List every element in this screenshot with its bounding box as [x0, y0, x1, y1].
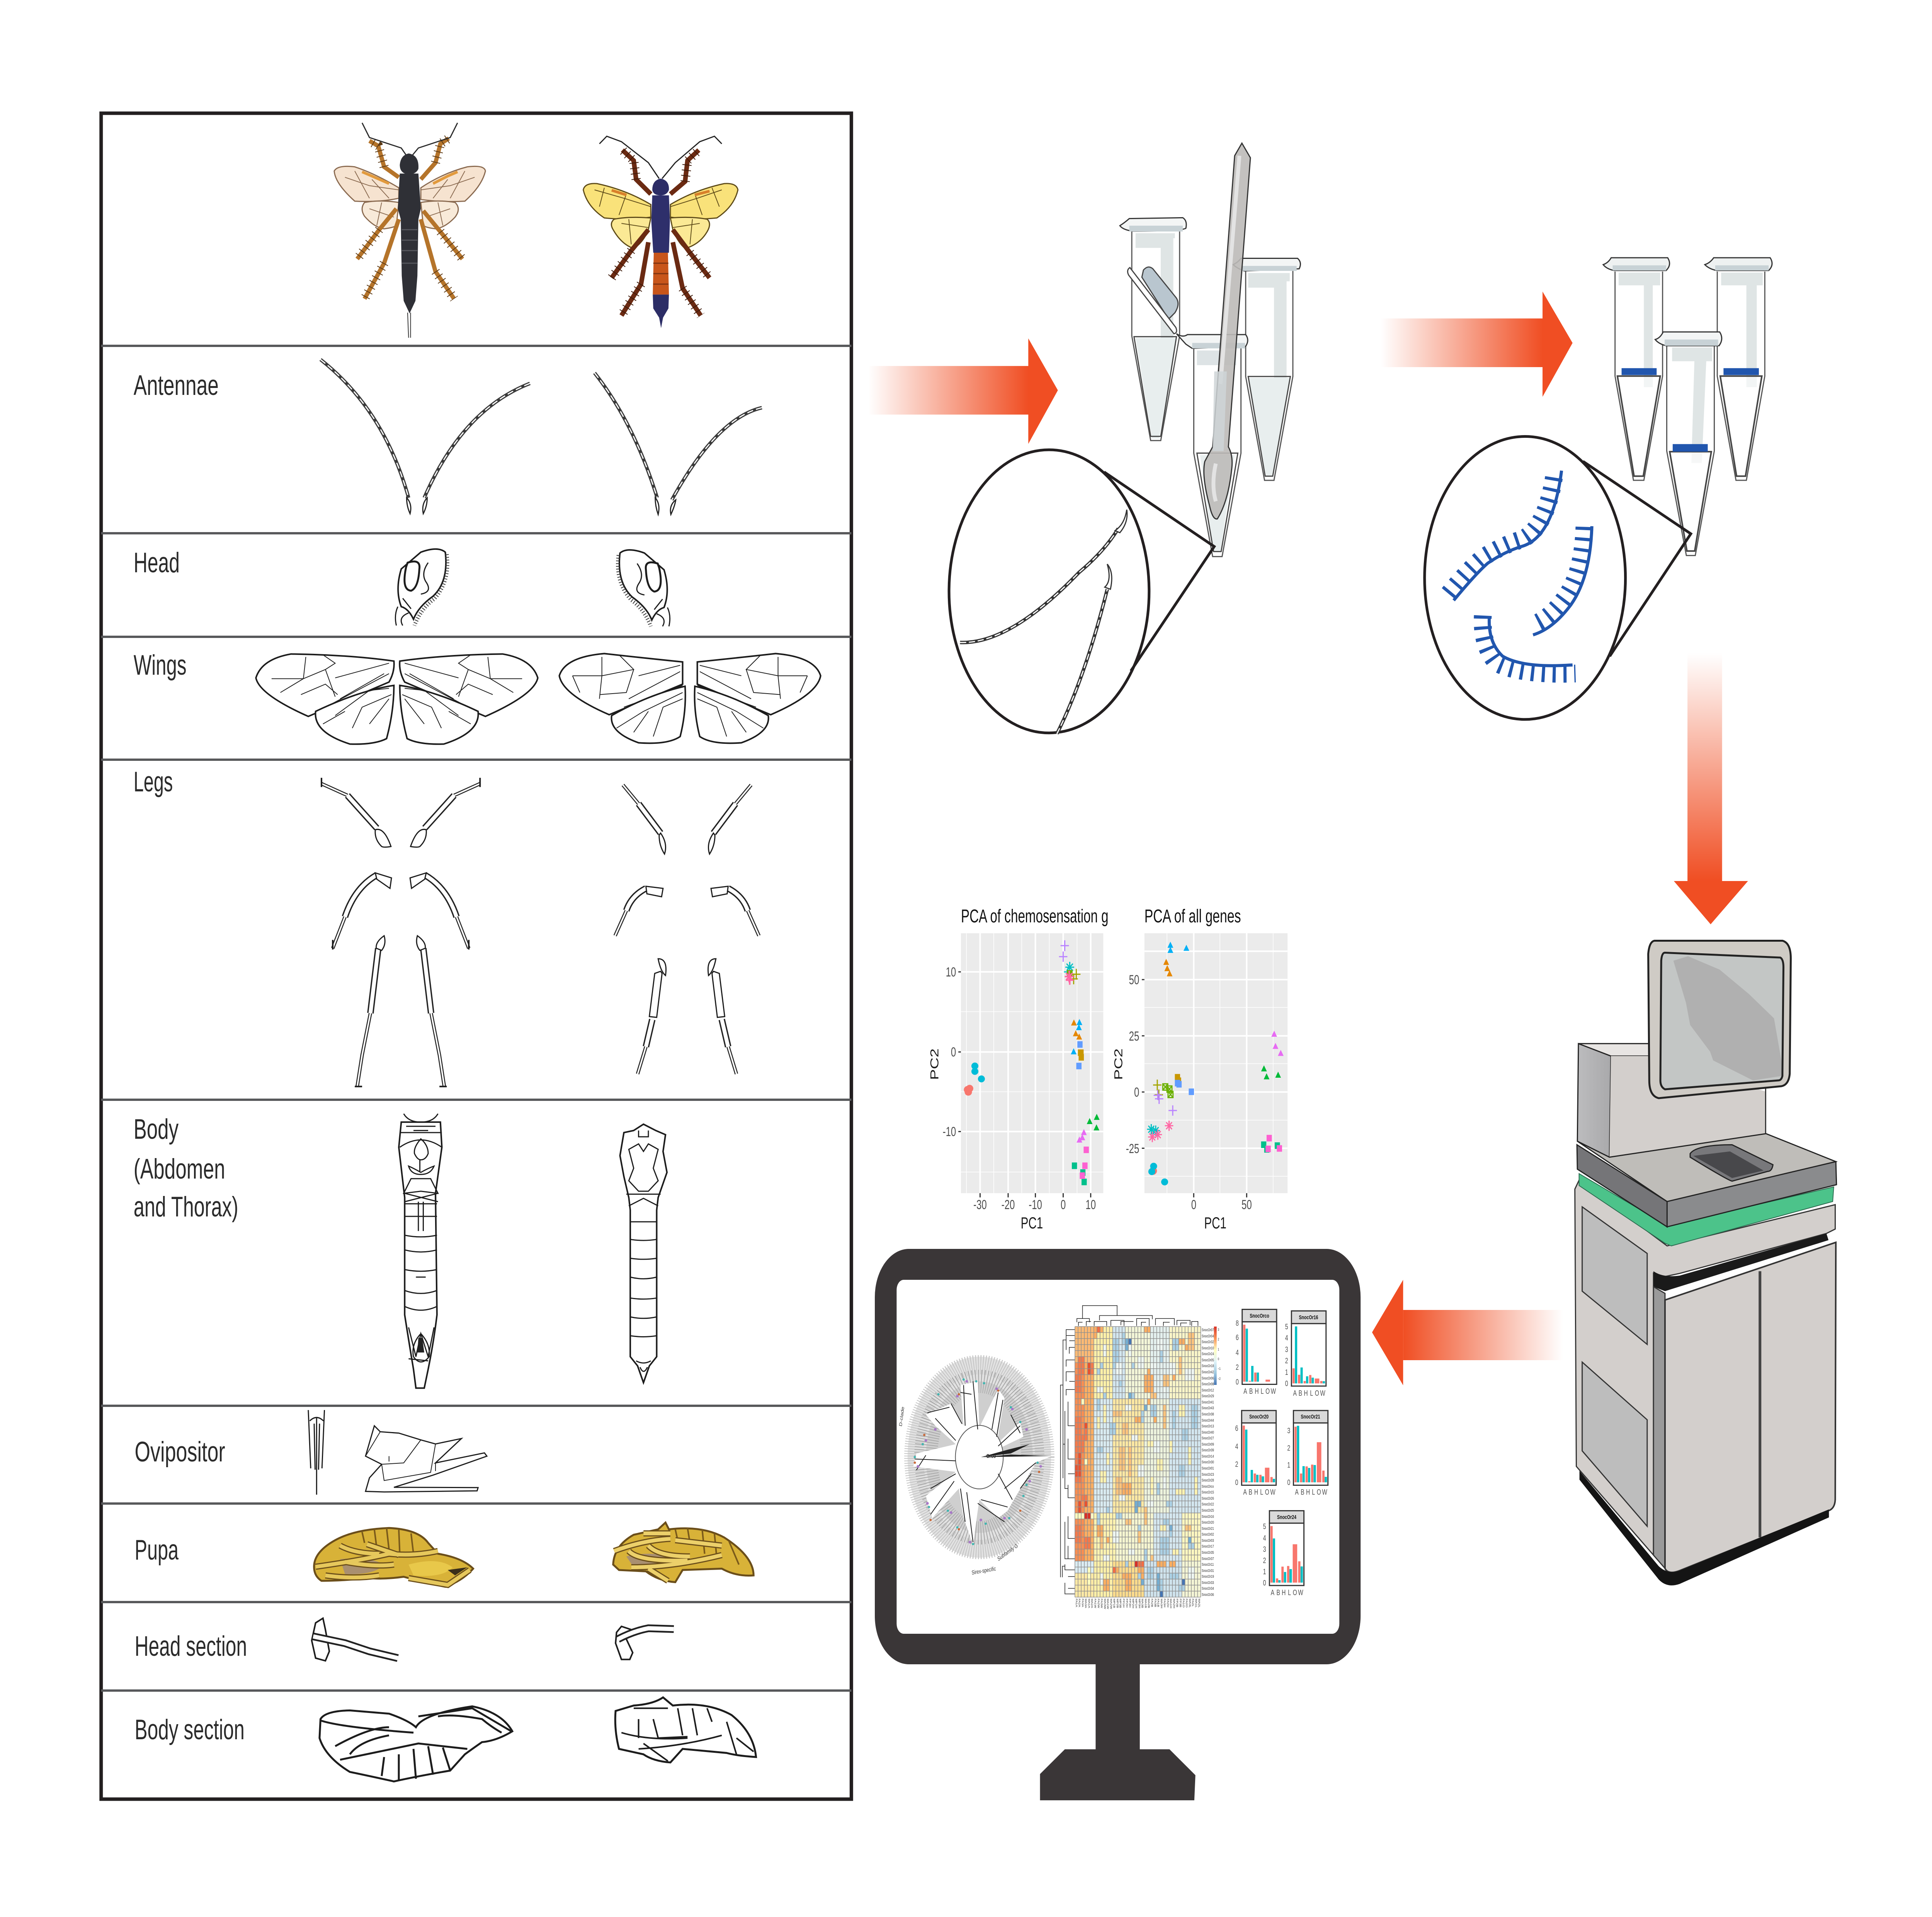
chart title: PCA of chemosensation g — [961, 905, 1109, 926]
heatmap row labels: SnocOr12 — [1202, 1388, 1214, 1392]
row label: Body (Abdomen and Thorax) — [134, 1114, 238, 1223]
heatmap row labels: SnocOr11 — [1202, 1562, 1214, 1567]
heatmap column labels: MA3H — [1160, 1599, 1163, 1608]
chart: bar plot SnocOr24: A — [1271, 1588, 1274, 1597]
heatmap row labels: SnocOr23 — [1202, 1472, 1214, 1476]
axis labels: PC1 — [1204, 1214, 1226, 1232]
heatmap row labels: SnocOr26 — [1202, 1496, 1214, 1500]
row label: Wings: Wings — [134, 650, 187, 681]
illustration: antennae line drawings — [320, 359, 762, 514]
axis labels: -10 — [943, 1124, 956, 1139]
tree labels: Orco — [986, 1453, 996, 1459]
heatmap column labels: MA2A — [1091, 1599, 1094, 1608]
chart: bar plot SnocOrco: W — [1271, 1387, 1276, 1396]
heatmap row labels: SnocOr43 — [1202, 1406, 1214, 1410]
heatmap column labels: FA1B — [1157, 1599, 1160, 1607]
chart: bar plot SnocOrco: 8 — [1236, 1319, 1239, 1328]
heatmap colour legend: 3 — [1218, 1328, 1219, 1332]
heatmap row labels: SnocOr21 — [1202, 1526, 1214, 1531]
axis labels: -10 — [1029, 1197, 1042, 1212]
heatmap colour legend: 1 — [1218, 1347, 1219, 1351]
heatmap column labels: FA2O — [1185, 1599, 1188, 1607]
heatmap grid lines — [1075, 1327, 1201, 1597]
chart: circular phylogenetic tree — [898, 1357, 1052, 1576]
icon: computer monitor — [875, 1249, 1361, 1800]
heatmap colour legend: −1 — [1218, 1367, 1221, 1371]
chart: bar plot SnocOr24: 5 — [1263, 1522, 1266, 1531]
chart: bar plot SnocOrco: L — [1261, 1387, 1264, 1396]
heatmap column labels: MA1A — [1088, 1599, 1090, 1608]
illustration: ovipositor — [308, 1410, 487, 1495]
tree labels: D-clade — [898, 1406, 905, 1427]
chart: bar plot SnocOr16: 0 — [1285, 1379, 1288, 1388]
heatmap colour legend: −2 — [1218, 1377, 1221, 1381]
chart: bar plot SnocOr24: O — [1293, 1588, 1297, 1597]
heatmap row labels: SnocOr35 — [1202, 1550, 1214, 1555]
axis labels: 25 — [1129, 1029, 1139, 1044]
heatmap row labels: SnocOr10 — [1202, 1346, 1214, 1350]
chart: bar plot SnocOr16: SnocOr16 — [1299, 1314, 1318, 1320]
chart: bar plot SnocOr20: W — [1270, 1488, 1276, 1497]
heatmap column labels: MA2W — [1110, 1599, 1112, 1609]
heatmap row labels: SnocOr18 — [1202, 1364, 1214, 1368]
chart: bar plot SnocOr20: 6 — [1235, 1424, 1238, 1433]
arrow: to RNA tubes — [1381, 291, 1573, 397]
axis labels — [928, 965, 1096, 1232]
heatmap column labels: FA3W — [1100, 1599, 1103, 1608]
heatmap row labels: SnocOr07 — [1202, 1328, 1214, 1332]
callout: magnified antennae — [949, 450, 1214, 734]
heatmap column labels: MP3H — [1138, 1599, 1141, 1608]
heatmap column labels: MA2L — [1198, 1599, 1201, 1608]
heatmap column labels: MA3B — [1141, 1599, 1144, 1608]
chart: bar plot SnocOr16: 3 — [1285, 1345, 1288, 1354]
tree labels — [898, 1406, 1019, 1576]
chart: heatmap of odorant receptor expression — [1061, 1306, 1221, 1609]
row label: Antennae: Antennae — [134, 370, 219, 401]
axis labels: 0 — [951, 1045, 956, 1060]
heatmap row labels: SnocOr29 — [1202, 1394, 1214, 1398]
heatmap column labels: MA2B — [1147, 1599, 1150, 1608]
heatmap column labels: FP3B — [1179, 1599, 1182, 1607]
arrow: to analysis computer — [1372, 1280, 1563, 1385]
heatmap column labels: FP2H — [1126, 1599, 1128, 1607]
heatmap row labels: SnocOr06 — [1202, 1376, 1214, 1380]
heatmap row labels: SnocOr14 — [1202, 1454, 1214, 1458]
chart: bar plot SnocOr24: B — [1276, 1588, 1280, 1597]
heatmap column labels: FP2B — [1176, 1599, 1179, 1607]
heatmap row labels: SnocOr02 — [1202, 1532, 1214, 1536]
chart: bar plot SnocOr16: B — [1299, 1389, 1302, 1398]
heatmap column labels: FA2B — [1151, 1599, 1153, 1607]
axis labels: -25 — [1126, 1141, 1139, 1156]
chart: bar plot SnocOr24: SnocOr24 — [1277, 1514, 1297, 1520]
illustration: body of second species — [620, 1124, 667, 1383]
axis labels: 10 — [1085, 1197, 1096, 1212]
row label: Body section: Body section — [135, 1714, 245, 1745]
heatmap column labels: MP2H — [1132, 1599, 1134, 1608]
axis labels: 10 — [946, 965, 956, 980]
heatmap colour legend: 2 — [1218, 1337, 1219, 1341]
row label: Body (Abdomen and Thorax): and Thorax) — [134, 1191, 238, 1223]
chart: bar plot SnocOr24: H — [1282, 1588, 1286, 1597]
illustration: legs of first species — [321, 778, 480, 1087]
illustration: yellow-winged wasp — [583, 136, 738, 328]
illustration: heads — [395, 549, 670, 626]
heatmap column labels: MP1B — [1113, 1599, 1116, 1608]
heatmap row labels: SnocOr05 — [1202, 1358, 1214, 1362]
row label: Ovipositor: Ovipositor — [135, 1436, 225, 1468]
chart: bar plot SnocOr16: W — [1320, 1389, 1325, 1398]
heatmap row labels: SnocOr44 — [1202, 1418, 1214, 1422]
chart: bar plot SnocOr16: O — [1315, 1389, 1319, 1398]
chart: bar plot SnocOr21: 0 — [1287, 1478, 1290, 1487]
axis labels: 0 — [1134, 1085, 1139, 1100]
callout: magnified RNA strands — [1425, 437, 1691, 720]
arrow: to sequencer — [1674, 653, 1748, 924]
heatmap row labels: SnocOr39 — [1202, 1448, 1214, 1452]
heatmap row labels: SnocOr13 — [1202, 1424, 1214, 1428]
heatmap colour legend — [1214, 1327, 1221, 1385]
heatmap row labels: SnocOr01 — [1202, 1466, 1214, 1470]
illustration: RNA tubes — [1603, 258, 1772, 556]
heatmap column labels: FA1W — [1094, 1599, 1097, 1608]
heatmap column labels: FA1O — [1182, 1599, 1185, 1607]
heatmap row labels: SnocOr24 — [1202, 1352, 1214, 1356]
heatmap column labels: FA2H — [1167, 1599, 1169, 1607]
chart: bar plot SnocOr21: SnocOr21 — [1301, 1413, 1320, 1420]
plot area and points — [1142, 933, 1287, 1197]
chart: bar plot SnocOr21 — [1287, 1410, 1328, 1497]
illustration: body of first species — [399, 1114, 442, 1388]
heatmap column labels: MP2B — [1116, 1599, 1119, 1608]
chart: bar plot SnocOr24: 2 — [1263, 1556, 1266, 1565]
illustration: pupa of first species — [314, 1528, 473, 1587]
illustration: wings of second species — [559, 653, 821, 743]
heatmap row labels: SnocOr34 — [1202, 1586, 1214, 1590]
chart: bar plot SnocOr24: L — [1288, 1588, 1291, 1597]
chart: bar plot SnocOr24: 3 — [1263, 1545, 1266, 1554]
heatmap column labels: MP3B — [1119, 1599, 1122, 1608]
chart: bar plot SnocOr16: 4 — [1285, 1334, 1288, 1342]
heatmap row labels: SnocOr04 — [1202, 1334, 1214, 1338]
chart: bar plot SnocOr21: W — [1322, 1488, 1327, 1497]
chart: bar plot SnocOr16: 1 — [1285, 1368, 1288, 1377]
illustration: wings of first species — [256, 654, 538, 744]
illustration: legs of second species — [615, 785, 759, 1074]
axis labels: PC2 — [1112, 1048, 1125, 1080]
axis labels: PC2 — [928, 1048, 941, 1080]
row label: Pupa: Pupa — [135, 1534, 179, 1566]
heatmap column labels: FA1A — [1075, 1599, 1078, 1607]
heatmap row labels: SnocOrco — [1202, 1484, 1214, 1488]
heatmap column labels: MA3W — [1104, 1599, 1106, 1609]
illustration: body sections — [320, 1698, 756, 1781]
heatmap column labels: MA1H — [1169, 1599, 1172, 1608]
heatmap row labels: SnocOr20 — [1202, 1520, 1214, 1524]
axis labels: 0 — [1191, 1197, 1196, 1212]
heatmap row labels: SnocOr37 — [1202, 1556, 1214, 1561]
chart: bar plot SnocOr20: H — [1254, 1488, 1258, 1497]
illustration: dark wasp — [334, 123, 485, 338]
chart: bar plot SnocOr24: W — [1298, 1588, 1303, 1597]
chart: bar plot SnocOr20: 2 — [1235, 1460, 1238, 1469]
chart: PCA of all genes — [1112, 905, 1287, 1232]
chart: bar plot SnocOr16: L — [1310, 1389, 1313, 1398]
heatmap column labels: MA3A — [1084, 1599, 1087, 1608]
chart: bar plot SnocOr20: A — [1243, 1488, 1247, 1497]
heatmap row labels: SnocOr27 — [1202, 1436, 1214, 1440]
axis labels: 0 — [1061, 1197, 1066, 1212]
chart: bar plot SnocOrco: 6 — [1236, 1333, 1239, 1342]
chart: bar plot SnocOrco: 4 — [1236, 1348, 1239, 1357]
heatmap column labels: MA1L — [1195, 1599, 1197, 1608]
heatmap row labels: SnocOr15 — [1202, 1490, 1214, 1494]
heatmap row labels: SnocOr36 — [1202, 1592, 1214, 1597]
chart: bar plot SnocOr21: L — [1312, 1488, 1315, 1497]
heatmap row labels — [1202, 1328, 1214, 1597]
chart: bar plot SnocOr20: L — [1260, 1488, 1263, 1497]
chart: bar plot SnocOr24 — [1263, 1511, 1304, 1597]
heatmap row labels: SnocOr33 — [1202, 1580, 1214, 1585]
chart: bar plot SnocOr21: 3 — [1287, 1426, 1290, 1435]
chart: PCA of chemosensation genes — [928, 905, 1109, 1232]
heatmap column labels: FA3H — [1163, 1599, 1166, 1607]
row label: Head section: Head section — [135, 1631, 247, 1662]
chart: bar plot SnocOrco: H — [1255, 1387, 1259, 1396]
chart: bar plot SnocOr20: 0 — [1235, 1478, 1238, 1487]
heatmap column labels: MP1H — [1135, 1599, 1138, 1608]
chart: bar plot SnocOrco: 2 — [1236, 1363, 1239, 1372]
heatmap row labels: SnocOr08 — [1202, 1382, 1214, 1386]
chart: bar plot SnocOr16: 5 — [1285, 1322, 1288, 1331]
heatmap column labels: FA2A — [1078, 1599, 1081, 1607]
chart: bar plot SnocOr21: 2 — [1287, 1444, 1290, 1453]
chart: bar plot SnocOr16: A — [1293, 1389, 1297, 1398]
heatmap row labels: SnocOr28 — [1202, 1478, 1214, 1482]
chart: bar plot SnocOr24: 4 — [1263, 1534, 1266, 1543]
chart: bar plot SnocOr20: O — [1265, 1488, 1269, 1497]
heatmap row labels: SnocOr16 — [1202, 1514, 1214, 1519]
heatmap row labels: SnocOr22 — [1202, 1502, 1214, 1506]
heatmap column labels: FP1H — [1122, 1599, 1125, 1607]
chart: bar plot SnocOr16: H — [1304, 1389, 1308, 1398]
heatmap colour legend: 0 — [1218, 1357, 1219, 1361]
heatmap row labels: SnocOr30 — [1202, 1460, 1214, 1464]
chart: bar plot SnocOr24: 1 — [1263, 1567, 1266, 1576]
chart: bar plot SnocOr20: SnocOr20 — [1249, 1413, 1269, 1420]
heatmap row labels: SnocOr25 — [1202, 1508, 1214, 1512]
heatmap column labels: MA2H — [1173, 1599, 1175, 1608]
heatmap cells — [1075, 1327, 1201, 1597]
axis labels — [1112, 973, 1252, 1232]
heatmap row labels: SnocOr32 — [1202, 1340, 1214, 1344]
illustration: pupa of second species — [613, 1522, 753, 1582]
illustration: sequencing instrument — [1575, 941, 1837, 1585]
chart: bar plot SnocOrco: A — [1243, 1387, 1247, 1396]
chart: bar plot SnocOrco — [1236, 1309, 1277, 1396]
heatmap row labels: SnocOr19 — [1202, 1574, 1214, 1579]
axis labels: -20 — [1002, 1197, 1015, 1212]
chart: bar plot SnocOrco: SnocOrco — [1250, 1312, 1269, 1319]
illustration: head sections — [312, 1618, 674, 1661]
heatmap column labels: FA3A — [1082, 1599, 1084, 1607]
panel: morphology table frame — [101, 113, 851, 1799]
heatmap column labels: MA1B — [1145, 1599, 1147, 1608]
chart: bar plot SnocOr21: H — [1306, 1488, 1310, 1497]
heatmap dendrograms — [1061, 1306, 1198, 1594]
row label: Legs: Legs — [134, 766, 173, 798]
chart: bar plot SnocOr21: B — [1301, 1488, 1304, 1497]
tree labels: Sirex-specific — [971, 1565, 996, 1576]
heatmap row labels: SnocOr31 — [1202, 1568, 1214, 1573]
tree labels: Subfamily G — [997, 1542, 1019, 1562]
heatmap column labels: FP3H — [1129, 1599, 1131, 1607]
heatmap row labels: SnocOr40 — [1202, 1430, 1214, 1434]
chart: bar plot SnocOrco: B — [1249, 1387, 1253, 1396]
chart: bar plot SnocOr24: 0 — [1263, 1579, 1266, 1587]
heatmap row labels: SnocOr03 — [1202, 1538, 1214, 1543]
chart: bar plot SnocOrco: 0 — [1236, 1378, 1239, 1386]
chart title: PCA of all genes — [1145, 905, 1241, 926]
axis labels: 50 — [1242, 1197, 1252, 1212]
row label: Body (Abdomen and Thorax): Body — [134, 1114, 179, 1145]
heatmap row labels: SnocOr38 — [1202, 1412, 1214, 1416]
chart: bar plot SnocOr21: O — [1317, 1488, 1321, 1497]
illustration: tubes and pestle — [1120, 143, 1300, 556]
axis labels: PC1 — [1021, 1214, 1043, 1232]
heatmap column labels — [1075, 1599, 1201, 1609]
chart: bar plot SnocOr20: B — [1249, 1488, 1252, 1497]
heatmap column labels: MA3L — [1189, 1599, 1191, 1608]
chart: bar plot SnocOr20 — [1235, 1410, 1276, 1497]
heatmap row labels: SnocOr41 — [1202, 1400, 1214, 1404]
arrow: to sample tubes — [868, 338, 1058, 444]
plot area and points — [958, 933, 1103, 1197]
heatmap row labels: SnocOr09 — [1202, 1442, 1214, 1446]
row label: Body (Abdomen and Thorax): (Abdomen — [134, 1153, 225, 1185]
chart: bar plot SnocOr21: 1 — [1287, 1461, 1290, 1470]
chart: bar plot SnocOr20: 4 — [1235, 1442, 1238, 1451]
chart: bar plot SnocOrco: O — [1265, 1387, 1270, 1396]
heatmap column labels: FA2W — [1097, 1599, 1100, 1608]
heatmap column labels: FA3B — [1154, 1599, 1157, 1607]
chart: bar plot SnocOr16: 2 — [1285, 1356, 1288, 1365]
axis labels: 50 — [1129, 973, 1139, 987]
heatmap column labels: MA1W — [1106, 1599, 1109, 1609]
axis labels: -30 — [973, 1197, 987, 1212]
heatmap row labels: SnocOr17 — [1202, 1544, 1214, 1548]
heatmap column labels: FA2L — [1192, 1599, 1194, 1607]
row label: Head: Head — [134, 547, 180, 578]
chart: bar plot SnocOr21: A — [1295, 1488, 1299, 1497]
chart: bar plot SnocOr16 — [1285, 1311, 1326, 1398]
heatmap row labels: SnocOr42 — [1202, 1370, 1214, 1374]
